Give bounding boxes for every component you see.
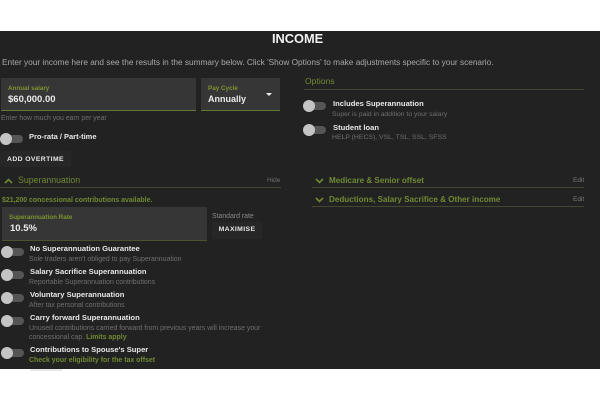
- option: salary sacrifice: Reportable Superannuation contributions: [29, 279, 155, 286]
- section header: deductions: Deductions, Salary Sacrifice & Other income: [329, 195, 500, 204]
- option: carry forward: concessional cap. Limits apply: [29, 334, 127, 341]
- intro text: Enter your income here and see the results in the summary below. Click 'Show Options' to make adjustments specific to your scenario.: [2, 58, 494, 67]
- salary helper text: Enter how much you earn per year: [1, 115, 107, 122]
- option: spouse contributions: Check your eligibility for the tax offset: [29, 357, 155, 364]
- section header: medicare: [312, 176, 584, 188]
- option: student loan: Student loan: [333, 123, 379, 132]
- toggle: pro-rata: Pro-rata / Part-time: [29, 132, 97, 141]
- section header: medicare: Medicare & Senior offset: [329, 176, 424, 185]
- section header: superannuation: Hide: [267, 177, 280, 184]
- section header: options: Options: [305, 76, 335, 86]
- add overtime button: [0, 151, 71, 167]
- option: salary sacrifice: Salary Sacrifice Superannuation: [30, 267, 146, 276]
- section header: superannuation: Superannuation: [18, 175, 80, 185]
- standard rate label: Standard rate: [212, 213, 254, 220]
- option: no superannuation guarantee: [1, 244, 182, 263]
- option: voluntary: Voluntary Superannuation: [30, 290, 124, 299]
- option: student loan: [303, 123, 447, 141]
- superannuation rate input: 10.5%: [10, 223, 37, 234]
- option: student loan: HELP (HECS), VSL, TSL, SSL, SFSS: [332, 134, 447, 141]
- superannuation rate input: [2, 207, 207, 241]
- superannuation rate input: Superannuation Rate: [9, 214, 72, 221]
- add overtime button: ADD OVERTIME: [7, 156, 64, 163]
- annual salary input: Annual salary: [8, 85, 49, 92]
- concessional contributions note: $21,200 concessional contributions available.: [2, 197, 152, 204]
- annual salary input: $60,000.00: [8, 94, 56, 105]
- option: spouse contributions: [1, 345, 155, 364]
- section header: deductions: [312, 195, 584, 207]
- option: includes superannuation: Super is paid in addition to your salary: [332, 111, 447, 118]
- icon: dropdown arrow: [266, 93, 272, 96]
- option: salary sacrifice: [1, 267, 155, 286]
- option: carry forward: [1, 313, 260, 341]
- option: no superannuation guarantee: No Superannuation Guarantee: [30, 244, 140, 253]
- maximise button: [212, 222, 262, 239]
- option: voluntary: After tax personal contributions: [29, 302, 125, 309]
- section header: superannuation: [0, 175, 281, 188]
- option: spouse contributions: Contributions to Spouse's Super: [30, 345, 148, 354]
- icon: chevron down: [316, 198, 324, 202]
- option: no superannuation guarantee: Sole traders aren't obliged to pay Superannuation: [29, 256, 182, 263]
- pay cycle select: Pay Cycle: [208, 85, 238, 92]
- icon: chevron up: [4, 178, 12, 184]
- section header: deductions: Edit: [573, 196, 584, 203]
- annual salary input: [1, 78, 196, 111]
- maximise button: MAXIMISE: [219, 226, 255, 233]
- option: carry forward: Unused contributions carried forward from previous years will increase your: [29, 325, 260, 332]
- option: carry forward: Carry forward Superannuation: [30, 313, 140, 322]
- option: includes superannuation: [303, 99, 448, 118]
- icon: chevron down: [316, 178, 324, 184]
- option: voluntary: [1, 290, 125, 309]
- section header: medicare: Edit: [573, 177, 584, 184]
- pay cycle select: Annually: [208, 94, 246, 104]
- title: INCOME: [272, 31, 323, 46]
- pay cycle select: [201, 78, 280, 111]
- option: includes superannuation: Includes Superannuation: [333, 99, 424, 108]
- toggle: pro-rata: [0, 132, 97, 145]
